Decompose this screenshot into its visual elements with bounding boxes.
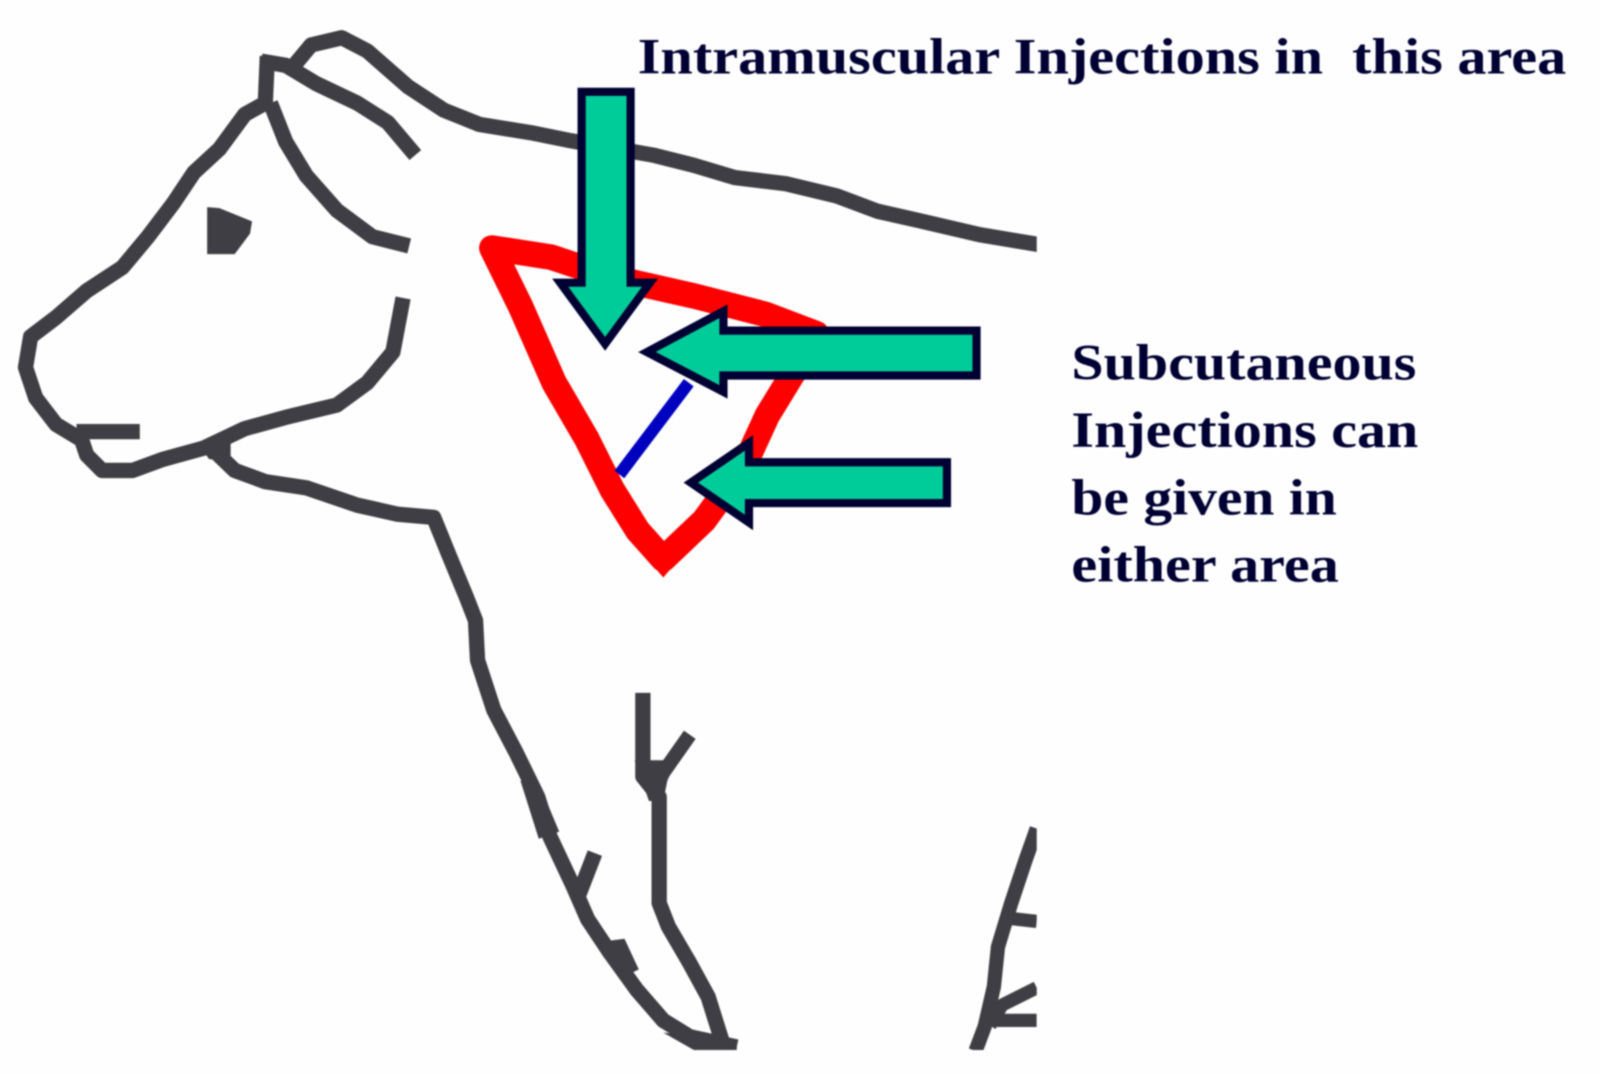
arrow: down to intramuscular area (560, 92, 650, 344)
face and jaw outline (26, 56, 403, 470)
heading: intramuscular label: Intramuscular Injections in this area (638, 29, 1566, 85)
back line and poll (291, 38, 1041, 245)
neck crease (270, 103, 409, 246)
text block: subcutaneous label (1071, 336, 1418, 594)
front leg inner line (643, 693, 724, 1049)
far leg line (976, 829, 1037, 1051)
arrow: lower subcutaneous area (691, 443, 947, 522)
red triangle: injection zone (492, 248, 816, 578)
arrow: upper subcutaneous area (647, 311, 977, 392)
jaw junction (206, 443, 232, 460)
cow line drawing (26, 38, 1041, 1051)
red bottom tip (645, 556, 682, 578)
far leg spurs (990, 918, 1037, 1026)
leg spurs (520, 735, 737, 1050)
ear line (261, 61, 415, 155)
text block: subcutaneous label: either area (1071, 538, 1339, 594)
chest and front leg outer line (209, 446, 737, 1047)
blue divider line (619, 383, 689, 474)
red outline (492, 248, 816, 559)
text block: subcutaneous label: Subcutaneous (1071, 336, 1416, 392)
text block: subcutaneous label: Injections can (1071, 403, 1418, 459)
mouth (77, 424, 140, 439)
text block: subcutaneous label: be given in (1071, 470, 1337, 526)
eye (207, 207, 252, 254)
